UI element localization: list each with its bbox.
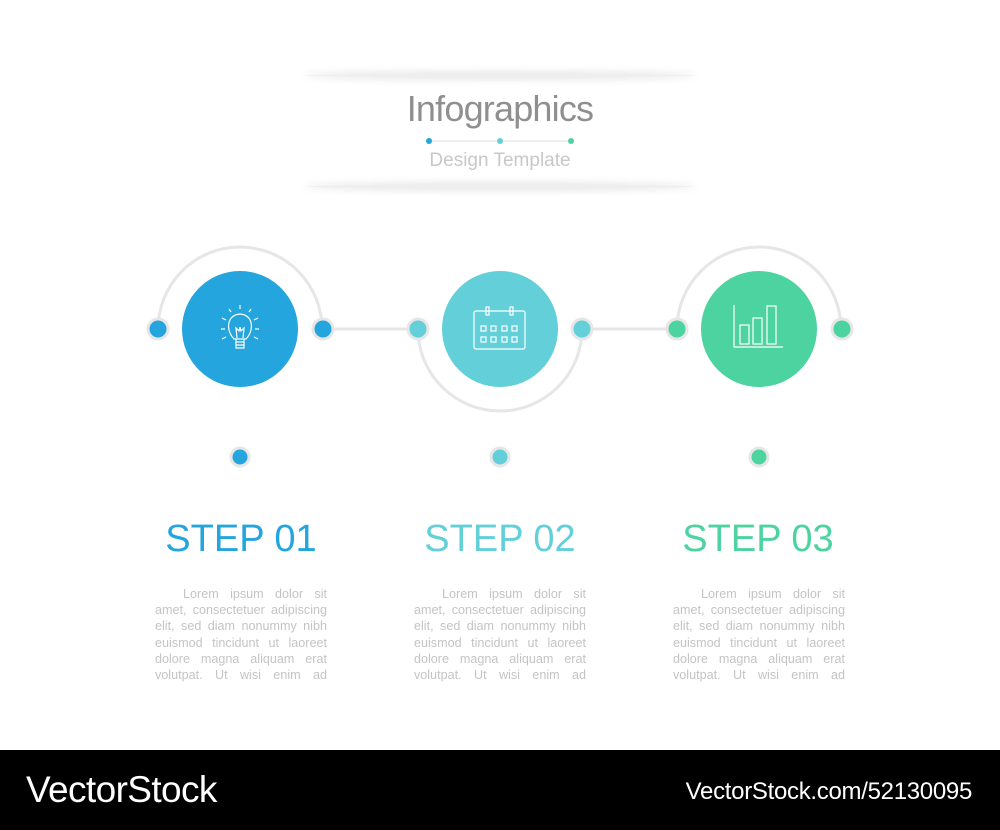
- step 2 text: Lorem ipsum dolor sit: [442, 587, 586, 601]
- footer url: VectorStock.com/52130095: [686, 778, 972, 805]
- card shadow top: [305, 74, 695, 77]
- icon: light bulb: [221, 305, 259, 348]
- step 3 text: Lorem ipsum dolor sit: [701, 587, 845, 601]
- icon: bar chart: [734, 305, 783, 347]
- step 1 node: [148, 247, 333, 387]
- step 1 heading: STEP 01: [165, 518, 317, 560]
- step 3 heading: STEP 03: [682, 518, 834, 560]
- lower dots: [231, 448, 768, 466]
- step 3 text: elit, sed diam nonummy nibh: [673, 619, 845, 633]
- step 1 text: dolore magna aliquam erat: [155, 652, 327, 666]
- step 1 text: Lorem ipsum dolor sit: [183, 587, 327, 601]
- step 2 text: volutpat. Ut wisi enim ad: [414, 668, 586, 682]
- icon: calendar: [474, 307, 525, 349]
- step 3 node: [667, 247, 852, 387]
- step 3 text: euismod tincidunt ut laoreet: [673, 636, 845, 650]
- step 3 text: amet, consectetuer adipiscing: [673, 603, 845, 617]
- footer logo: VectorStock: [26, 769, 217, 810]
- step 1 text: [155, 587, 327, 682]
- card shadow bottom: [305, 185, 695, 188]
- step 2 text: euismod tincidunt ut laoreet: [414, 636, 586, 650]
- connectors: [323, 328, 677, 330]
- step 3 text: [673, 587, 845, 682]
- title text: Infographics: [407, 88, 593, 129]
- step 1 text: amet, consectetuer adipiscing: [155, 603, 327, 617]
- step 1 text: elit, sed diam nonummy nibh: [155, 619, 327, 633]
- footer band: [0, 750, 1000, 830]
- title card: [306, 70, 694, 192]
- step 2 text: elit, sed diam nonummy nibh: [414, 619, 586, 633]
- step 3 text: volutpat. Ut wisi enim ad: [673, 668, 845, 682]
- subtitle: Design Template: [429, 150, 571, 171]
- step 2 heading: STEP 02: [424, 518, 576, 560]
- step 2 node: [408, 271, 592, 411]
- step 1 text: euismod tincidunt ut laoreet: [155, 636, 327, 650]
- step 2 text: dolore magna aliquam erat: [414, 652, 586, 666]
- timeline diagram: [146, 246, 854, 468]
- step 3 text: dolore magna aliquam erat: [673, 652, 845, 666]
- step 2 text: amet, consectetuer adipiscing: [414, 603, 586, 617]
- step 1 text: volutpat. Ut wisi enim ad: [155, 668, 327, 682]
- title dots line: [426, 138, 574, 144]
- step 2 text: [414, 587, 586, 682]
